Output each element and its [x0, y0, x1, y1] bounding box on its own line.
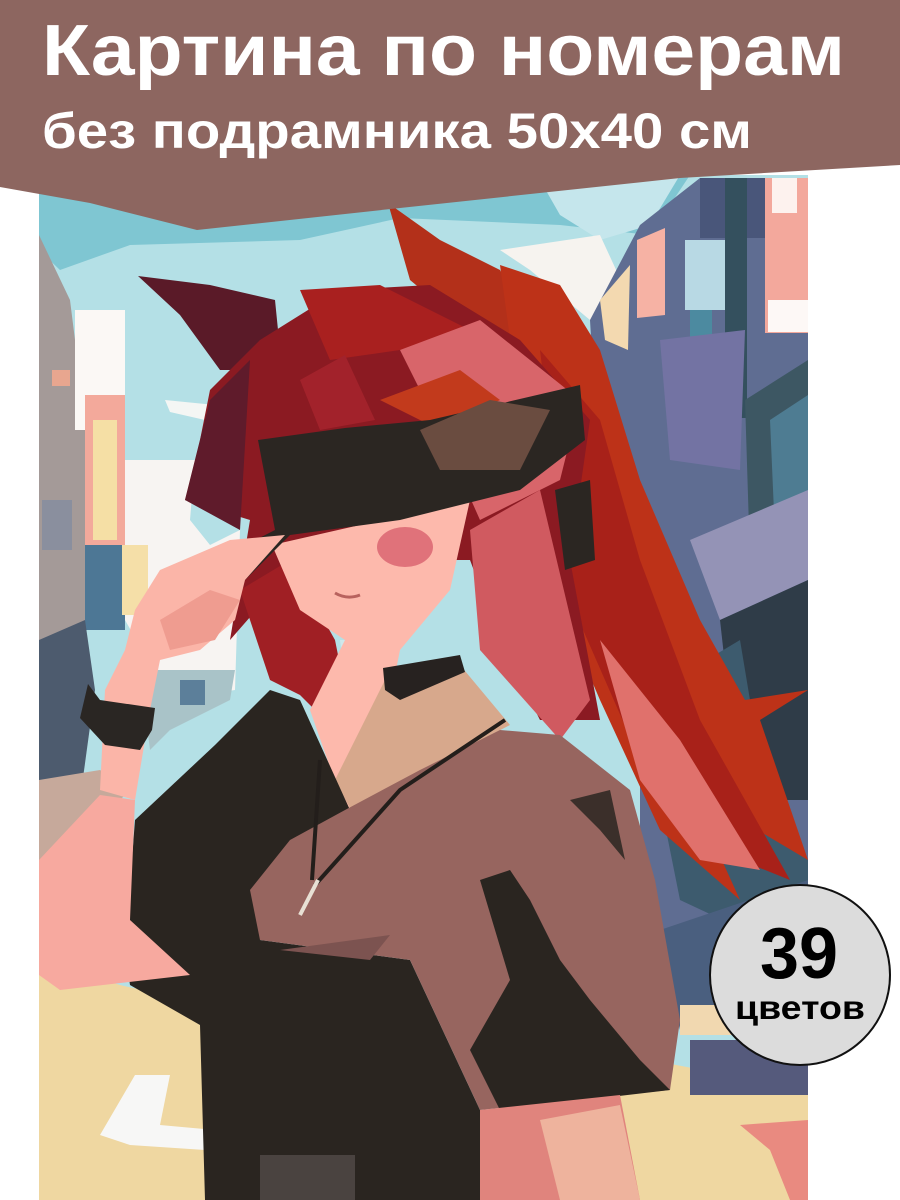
character: blindfold	[240, 385, 595, 580]
character: wrist watch	[80, 684, 155, 750]
top banner	[0, 0, 900, 230]
character: back hair and ears	[138, 203, 808, 900]
character: t-shirt	[125, 690, 680, 1200]
title: Картина по номерам	[42, 11, 845, 91]
subtitle: без подрамника 50х40 см	[42, 103, 752, 159]
painting background: street scene	[39, 175, 808, 1200]
painting: paint-by-numbers picture	[39, 175, 808, 1200]
badge number: 39	[760, 914, 838, 994]
street ground	[39, 960, 230, 1200]
character: raised arm and hand	[39, 535, 285, 990]
right side buildings	[590, 178, 808, 1010]
badge label: цветов	[735, 989, 865, 1026]
character: face, neck and chest	[272, 500, 510, 810]
badge: number of colours	[710, 885, 890, 1065]
